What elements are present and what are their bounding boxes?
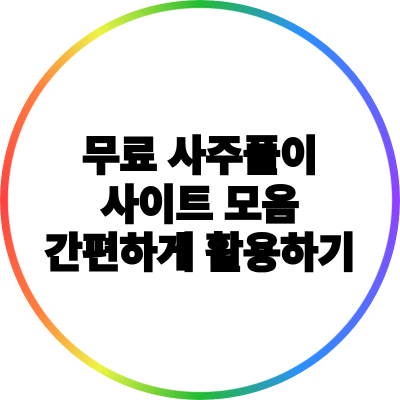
title: 간편하게 활용하기 — [45, 230, 355, 276]
title: 사이트 모음 — [101, 182, 299, 228]
title: 무료 사주풀이 — [82, 133, 318, 179]
title — [44, 133, 355, 276]
